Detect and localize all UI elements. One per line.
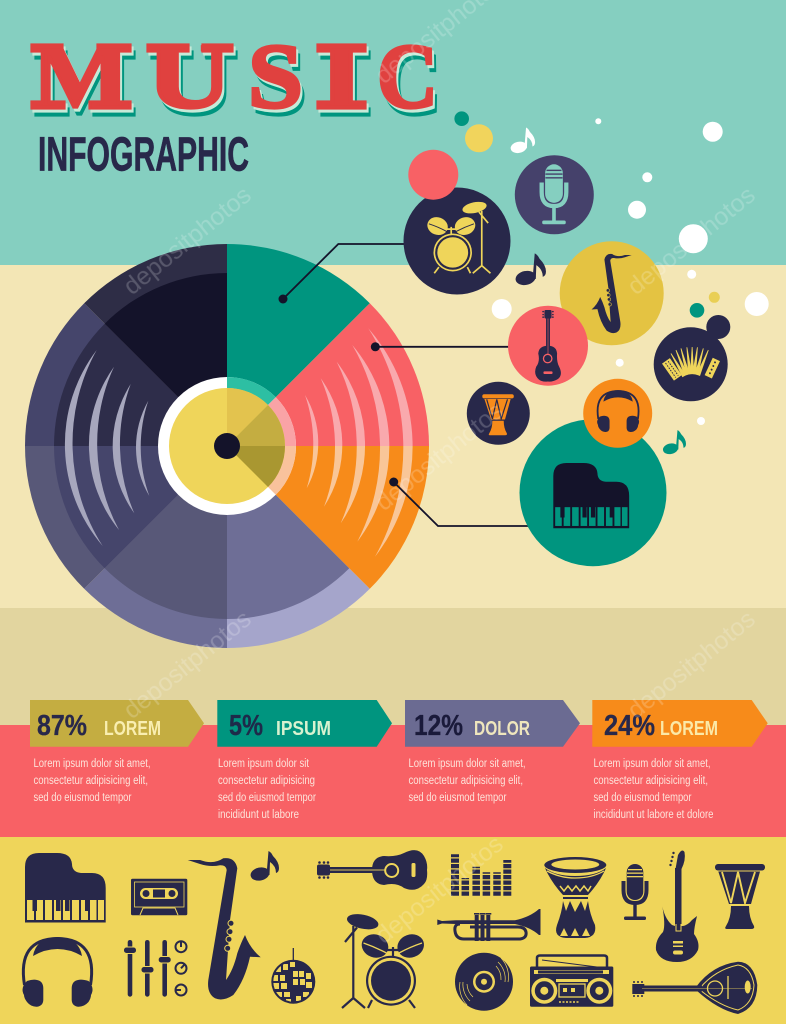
icon: mixer sliders bbox=[124, 940, 186, 997]
icon: disco ball bbox=[271, 948, 315, 1004]
record grooves, left bbox=[65, 350, 149, 546]
body text: column 2: consectetur adipisicing bbox=[218, 775, 315, 787]
stat tag: 87% lorem bbox=[30, 700, 204, 747]
body text: column 4: consectetur adipisicing elit, bbox=[594, 775, 708, 787]
icon row: instruments bbox=[23, 850, 765, 1014]
body text: column 1: consectetur adipisicing elit, bbox=[34, 775, 148, 787]
title: MUSIC: U bbox=[147, 25, 232, 127]
record grooves, right bbox=[305, 328, 413, 557]
body text: column 4: sed do eiusmod tempor bbox=[594, 792, 692, 804]
icon: music note bbox=[249, 851, 279, 882]
title: MUSIC: I bbox=[318, 25, 365, 127]
stat tag: 5% ipsum bbox=[217, 700, 392, 747]
stat tag: 12% dolor bbox=[405, 700, 580, 747]
background: cream band bbox=[0, 265, 786, 608]
icon: acoustic guitar bbox=[317, 850, 427, 890]
body text: column 3: sed do eiusmod tempor bbox=[408, 792, 507, 804]
icon: djembe bbox=[715, 864, 765, 929]
icon: cassette tape bbox=[131, 879, 187, 915]
stat tag: 12% dolor: DOLOR bbox=[474, 718, 530, 740]
stat tag: 5% ipsum: IPSUM bbox=[276, 718, 331, 740]
stat tag: 24% lorem: 24% bbox=[604, 710, 655, 742]
watermarks: depositphotos bbox=[622, 605, 761, 725]
connector line: green segment to drums bbox=[278, 244, 410, 304]
record label bbox=[158, 377, 296, 515]
body text: column 4: Lorem ipsum dolor sit amet, bbox=[594, 758, 710, 770]
stat tag: 87% lorem: LOREM bbox=[104, 718, 161, 740]
stat tag: 5% ipsum: 5% bbox=[229, 710, 263, 742]
bubble: saxophone bbox=[560, 241, 664, 345]
title: MUSIC: C bbox=[377, 25, 438, 127]
segment: orange bbox=[227, 446, 429, 589]
title: MUSIC bbox=[32, 25, 442, 134]
icon: microphone bbox=[624, 864, 646, 920]
stat tag: 12% dolor: 12% bbox=[414, 710, 463, 742]
segment: dark navy bbox=[84, 244, 227, 446]
vinyl record pie chart bbox=[25, 244, 429, 648]
icon: trumpet bbox=[437, 909, 540, 941]
stat tag: 87% lorem: 87% bbox=[37, 710, 87, 742]
stat tag: 24% lorem bbox=[592, 700, 768, 747]
bubble: coral dot bbox=[408, 150, 458, 200]
background: yellow icon band bbox=[0, 837, 786, 1024]
body text: column 1: Lorem ipsum dolor sit amet, bbox=[34, 758, 150, 770]
watermarks bbox=[118, 0, 761, 950]
body text: column 4 bbox=[594, 758, 714, 821]
bubble: accordion bbox=[654, 315, 730, 401]
title: MUSIC: U bbox=[151, 32, 236, 134]
stat tag: 24% lorem: LOREM bbox=[660, 718, 718, 740]
icon: white music note bbox=[510, 128, 535, 155]
title: MUSIC: S bbox=[250, 28, 305, 130]
title: MUSIC: I bbox=[322, 32, 369, 134]
body text: column 2: Lorem ipsum dolor sit bbox=[218, 758, 310, 770]
bubble: guitar bbox=[508, 306, 588, 386]
connector line: coral segment to guitar bbox=[371, 342, 512, 351]
watermarks: depositphotos bbox=[118, 605, 257, 725]
background: teal header band bbox=[0, 0, 786, 265]
title: MUSIC: M bbox=[34, 28, 132, 130]
icon: equalizer bbox=[455, 854, 507, 896]
title: MUSIC: S bbox=[248, 25, 303, 127]
bubble: djembe drum bbox=[467, 382, 530, 445]
watermarks: depositphotos bbox=[370, 397, 509, 517]
segment: slate bbox=[84, 446, 227, 648]
connector line: orange segment to piano bbox=[389, 478, 530, 526]
icon: vinyl record bbox=[455, 953, 513, 1011]
title: MUSIC: C bbox=[381, 32, 442, 134]
body text: column 1 bbox=[34, 758, 150, 804]
bubble: piano bbox=[520, 419, 666, 566]
segment: grey violet bbox=[25, 446, 227, 589]
body text: column 3: consectetur adipisicing elit, bbox=[408, 775, 523, 787]
background: coral stats band bbox=[0, 725, 786, 837]
background: tan band bbox=[0, 608, 786, 725]
body text: column 1: sed do eiusmod tempor bbox=[34, 792, 132, 804]
icon: headphones bbox=[23, 937, 93, 1007]
icon: boombox bbox=[530, 956, 613, 1007]
icon: grand piano bbox=[25, 853, 106, 922]
icon: green music note bbox=[662, 430, 686, 455]
icon: saxophone bbox=[188, 858, 261, 999]
title: MUSIC: M bbox=[32, 25, 130, 127]
icon: dark music note bbox=[514, 253, 546, 287]
segment: coral bbox=[227, 303, 429, 446]
title: MUSIC: U bbox=[149, 28, 234, 130]
watermarks: depositphotos bbox=[118, 181, 257, 301]
bubble: drum kit bbox=[404, 188, 510, 294]
title: MUSIC: S bbox=[252, 32, 307, 134]
body text: column 2: incididunt ut labore bbox=[218, 809, 299, 821]
body text: column 3: Lorem ipsum dolor sit amet, bbox=[408, 758, 526, 770]
bubble: microphone bbox=[515, 155, 594, 234]
subtitle: INFOGRAPHIC: INFOGRAPHIC bbox=[38, 128, 249, 182]
title: MUSIC: I bbox=[320, 28, 367, 130]
bubble: headphones bbox=[583, 379, 652, 448]
decorative bubbles bbox=[454, 111, 769, 425]
title: MUSIC: C bbox=[379, 28, 440, 130]
watermarks: depositphotos bbox=[370, 830, 509, 950]
icon: electric guitar bbox=[656, 851, 698, 962]
body text: column 4: incididunt ut labore et dolore bbox=[594, 809, 714, 821]
segment: green bbox=[227, 244, 370, 446]
icon: goblet drum bbox=[544, 857, 606, 938]
body text: column 2: sed do eiusmod tempor bbox=[218, 792, 316, 804]
watermarks: depositphotos bbox=[622, 181, 761, 301]
body text: column 3 bbox=[408, 758, 526, 804]
segment: indigo bbox=[25, 303, 227, 446]
icon: drum kit bbox=[342, 912, 427, 1008]
body text: column 2 bbox=[218, 758, 316, 821]
segment: lavender bbox=[227, 446, 370, 648]
title: MUSIC: M bbox=[36, 32, 134, 134]
icon: oud lute bbox=[632, 962, 757, 1014]
